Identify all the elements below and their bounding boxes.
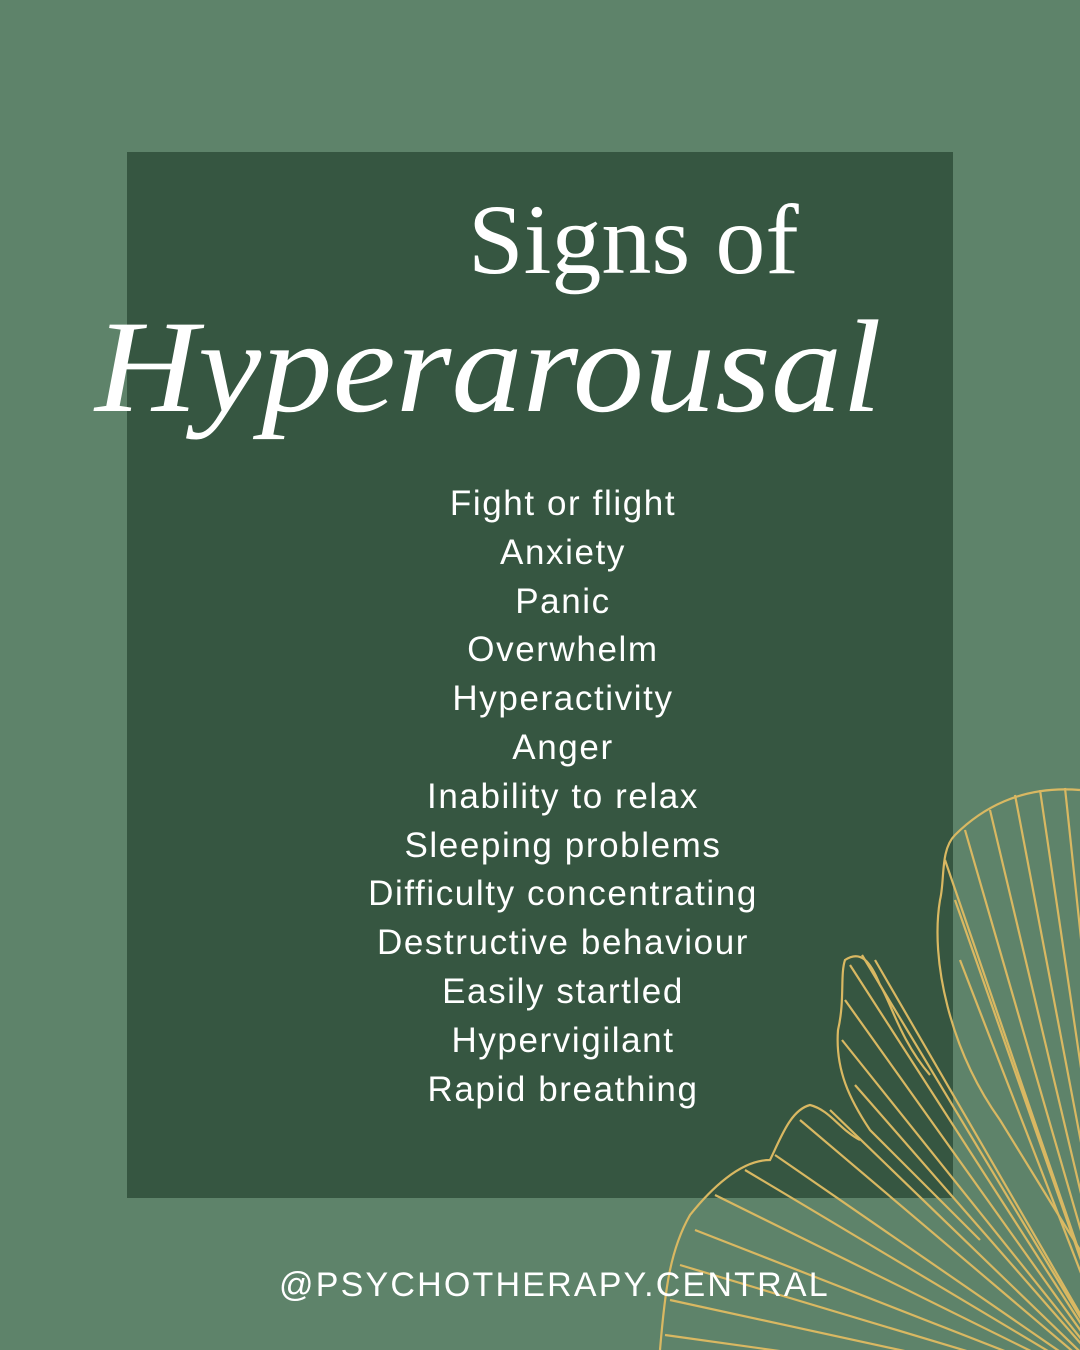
text block: list of signs: Destructive behaviour [377, 923, 749, 962]
text block: list of signs: Difficulty concentrating [368, 874, 758, 913]
text block: list of signs: Anger [512, 728, 614, 767]
heading: Signs of: Signs of [468, 184, 799, 295]
text block: list of signs: Inability to relax [427, 777, 699, 816]
text block: list of signs: Hypervigilant [451, 1021, 675, 1060]
text block: list of signs: Overwhelm [467, 630, 659, 669]
text block: list of signs [368, 484, 758, 1109]
text block: list of signs: Rapid breathing [427, 1070, 699, 1109]
footer handle: @PSYCHOTHERAPY.CENTRAL [279, 1266, 830, 1304]
text block: list of signs: Easily startled [442, 972, 684, 1011]
text block: list of signs: Fight or flight [450, 484, 676, 523]
panel: dark green card [127, 152, 953, 1198]
text block: list of signs: Sleeping problems [404, 826, 722, 865]
text block: list of signs: Panic [515, 582, 611, 621]
heading: Hyperarousal script: Hyperarousal [95, 293, 882, 440]
text block: list of signs: Anxiety [500, 533, 626, 572]
text block: list of signs: Hyperactivity [452, 679, 674, 718]
